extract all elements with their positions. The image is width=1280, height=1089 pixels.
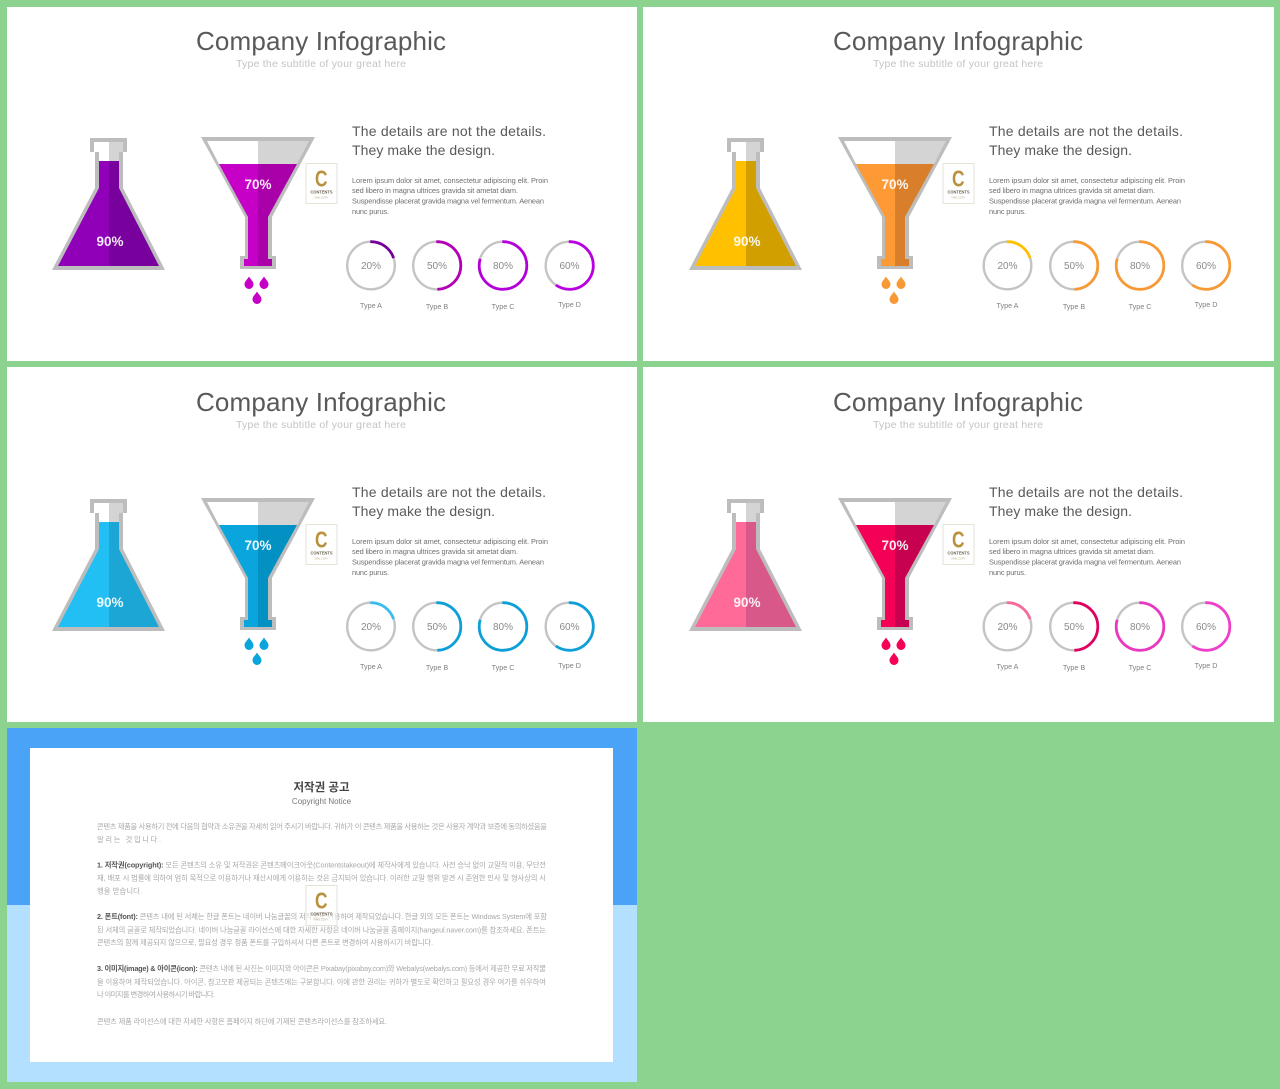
funnel chart 70% <box>201 137 315 269</box>
body text: nunc purus. <box>989 568 1026 577</box>
ring chart: Type B 50%: 50% <box>1064 261 1084 272</box>
body text: sed libero in magna ultrices gravida sit ametat diam. <box>352 186 518 195</box>
ring chart: Type C 80% <box>479 603 527 672</box>
ring chart: Type A 20% <box>347 603 395 671</box>
ring chart: Type D 60% <box>546 603 593 670</box>
ring chart: Type D 60%: Type D <box>558 300 581 309</box>
section: image and icon: 나 이미지를 변경하여 사용하시기 바랍니다. <box>97 990 215 999</box>
heading: They make the design. <box>352 503 495 519</box>
logo: C <box>315 888 328 914</box>
flask chart 90% <box>52 138 165 270</box>
ring chart: Type C 80%: 80% <box>493 622 513 633</box>
ring chart: Type C 80% <box>1116 603 1164 672</box>
ring chart: Type B 50%: 50% <box>427 261 447 272</box>
ring chart: Type B 50% <box>1050 603 1098 672</box>
icon: drops <box>882 276 906 304</box>
ring chart: Type A 20%: 20% <box>997 622 1018 633</box>
subtitle: Type the subtitle of your great here <box>873 58 1043 70</box>
ring chart: Type A 20%: 20% <box>997 261 1018 272</box>
logo <box>943 524 974 564</box>
subtitle: Type the subtitle of your great here <box>873 419 1043 431</box>
logo: MAIL COPY <box>314 918 328 922</box>
section: font: 된 서체의 글꼴로 제작되었습니다. 네이버 나눔글꼴 라이선스에 대한 자세한 사항은 네이버 나눔글꼴 홈페이지(hangeul.naver.com)를 참조하세요. 폰트는 <box>97 926 546 934</box>
body text <box>989 176 1185 216</box>
ring chart: Type B 50%: 50% <box>1064 622 1084 633</box>
logo: MAIL COPY <box>952 196 966 200</box>
ring chart: Type C 80%: 80% <box>493 261 513 272</box>
ring chart: Type D 60%: 60% <box>1196 261 1216 272</box>
flask chart 90%: 90% <box>96 595 124 610</box>
panel: copyright notice <box>7 728 637 1082</box>
ring chart: Type B 50% <box>413 603 461 672</box>
heading: The details are not the details. <box>352 484 546 500</box>
section: copyright: 재, 배포 시 법률에 의하여 엄히 목적으로 이용하거나 재산시에게 이용하는 것은 금지되어 있습니다. 이러한 교말 행위 발견 시 준엄한 민사 및 형사상의 시 <box>97 874 546 882</box>
heading: They make the design. <box>989 503 1132 519</box>
funnel chart 70% <box>838 137 952 269</box>
ring chart: Type A 20% <box>984 603 1031 671</box>
flask chart 90%: 90% <box>733 234 761 249</box>
ring chart: Type C 80%: Type C <box>1129 663 1151 672</box>
title: Company Infographic <box>196 387 446 417</box>
logo <box>306 886 337 926</box>
ring chart: Type B 50%: Type B <box>1063 302 1085 311</box>
ring chart: Type C 80%: Type C <box>492 302 514 311</box>
funnel chart 70%: 70% <box>244 177 272 192</box>
ring chart: Type A 20% <box>984 242 1031 310</box>
icon: drops <box>244 276 268 304</box>
icon: drops <box>244 638 268 665</box>
section: copyright: 1. 저작권(copyright): 모든 콘텐츠의 소유 및 저작권은 콘텐츠메이크아웃(Contentstakeout)에 제작사에게 있습니다. 사전 승낙 없이 교말적 이용, 무단전 <box>97 860 546 870</box>
logo: MAIL COPY <box>952 556 966 560</box>
funnel chart 70% <box>838 498 952 630</box>
logo: CONTENTS <box>948 550 970 556</box>
ring chart: Type D 60%: Type D <box>1195 661 1217 670</box>
logo <box>306 164 337 204</box>
title: Company Infographic <box>196 26 446 56</box>
ring chart: Type A 20% <box>347 242 395 310</box>
logo: MAIL COPY <box>314 196 328 200</box>
ring chart: Type B 50%: Type B <box>1063 663 1085 672</box>
ring chart: Type C 80%: 80% <box>1130 622 1150 633</box>
logo: CONTENTS <box>310 190 332 194</box>
heading: The details are not the details. <box>352 123 546 139</box>
ring chart: Type B 50% <box>413 242 461 311</box>
ring chart: Type D 60%: 60% <box>1196 622 1216 633</box>
ring chart: Type A 20%: Type A <box>997 662 1019 671</box>
intro paragraph <box>97 822 547 844</box>
panel: orange infographic <box>643 7 1274 361</box>
logo: CONTENTS <box>310 550 332 556</box>
ring chart: Type B 50%: 50% <box>427 622 447 633</box>
section: copyright <box>97 860 546 896</box>
section: font: 2. 폰트(font): 콘텐츠 내에 된 서체는 한글 폰트는 네이버 나눔글꼴의 저작물로 이용하여 제작되었습니다. 한글 외의 모든 폰트는 Windows System에 포함 <box>97 912 547 921</box>
body text: Lorem ipsum dolor sit amet, consectetur adipiscing elit. Proin <box>352 537 548 546</box>
ring chart: Type A 20%: 20% <box>361 261 381 272</box>
body text: Suspendisse placerat gravida magna vel fermentum. Aenean <box>989 196 1181 206</box>
ring chart: Type A 20%: Type A <box>997 301 1019 310</box>
ring chart: Type D 60%: Type D <box>1195 300 1217 309</box>
logo: C <box>315 166 328 192</box>
flask chart 90% <box>689 138 802 270</box>
title: Company Infographic <box>833 26 1083 56</box>
ring chart: Type C 80% <box>1116 242 1164 311</box>
flask chart 90%: 90% <box>733 595 761 610</box>
ring chart: Type A 20%: 20% <box>361 622 381 633</box>
ring chart: Type B 50% <box>1050 242 1098 311</box>
logo: MAIL COPY <box>314 556 328 560</box>
logo: CONTENTS <box>310 912 332 916</box>
section: image and icon <box>97 964 546 999</box>
ring chart: Type D 60% <box>1182 603 1230 670</box>
ring chart: Type A 20%: Type A <box>360 301 382 310</box>
logo: C <box>315 526 328 552</box>
notice heading: 저작권 공고 <box>293 780 350 794</box>
heading <box>352 484 546 519</box>
body text: Suspendisse placerat gravida magna vel fermentum. Aenean <box>352 558 544 566</box>
funnel chart 70%: 70% <box>244 538 272 553</box>
heading: The details are not the details. <box>989 123 1183 139</box>
section: image and icon: 3. 이미지(image) & 아이콘(icon): 콘텐츠 내에 된 사진는 이미지와 아이콘은 Pixabay(pixabay.com)와 Webalys(webalys.com) 등에서 제공한 무료 저작물 <box>97 964 546 973</box>
body text: nunc purus. <box>352 568 389 577</box>
subtitle: Type the subtitle of your great here <box>236 58 406 70</box>
ring chart: Type D 60% <box>1182 242 1230 309</box>
body text: sed libero in magna ultrices gravida sit ametat diam. <box>352 547 518 556</box>
section: image and icon: 을 이용하여 제작되었습니다. 아이콘, 참고모판 제공되는 콘텐츠에는 구분합니다. 이에 관한 권리는 귀하가 별도로 확인하고 필요성 경우 여기를 쉬우하여 <box>97 978 546 986</box>
body text <box>352 176 548 216</box>
ring chart: Type A 20%: Type A <box>360 662 382 671</box>
body text: Lorem ipsum dolor sit amet, consectetur adipiscing elit. Proin <box>352 176 548 185</box>
body text <box>989 537 1185 577</box>
intro paragraph: 콘텐츠 제품을 사용하기 전에 다음의 협약과 소유권을 자세히 읽어 주시기 바랍니다. 귀하가 이 콘텐츠 제품을 사용하는 것은 사용자 계약과 보증에 동의하셨음을 <box>97 822 547 831</box>
ring chart: Type B 50%: Type B <box>426 663 448 672</box>
panel: purple infographic <box>7 7 637 361</box>
flask chart 90%: 90% <box>96 234 124 249</box>
heading: They make the design. <box>352 142 495 158</box>
heading <box>989 484 1183 519</box>
body text <box>352 537 548 577</box>
logo <box>943 164 974 204</box>
ring chart: Type C 80% <box>479 242 527 311</box>
logo: C <box>952 166 965 192</box>
icon: drops <box>882 638 906 665</box>
ring chart: Type D 60%: 60% <box>559 622 580 633</box>
closing line: 콘텐츠 제품 라이선스에 대한 자세한 사항은 홈페이지 하단에 기재된 콘텐츠라이선스를 참조하세요. <box>97 1017 387 1026</box>
section: font <box>97 912 547 947</box>
ring chart: Type D 60%: 60% <box>559 261 580 272</box>
funnel chart 70%: 70% <box>881 538 909 553</box>
body text: Suspendisse placerat gravida magna vel fermentum. Aenean <box>352 196 544 206</box>
heading <box>989 123 1183 158</box>
section: font: 콘텐츠의 함께 제공되지 않으므로, 필요성 경우 정품 폰트를 구입하셔서 다른 폰트로 변경하여 사용하시기 바랍니다. <box>97 938 433 947</box>
logo: CONTENTS <box>948 190 970 194</box>
body text: Lorem ipsum dolor sit amet, consectetur adipiscing elit. Proin <box>989 537 1185 546</box>
body text: nunc purus. <box>352 207 389 216</box>
ring chart: Type D 60%: Type D <box>558 661 581 670</box>
heading <box>352 123 546 158</box>
funnel chart 70% <box>201 498 315 630</box>
body text: sed libero in magna ultrices gravida sit ametat diam. <box>989 186 1155 195</box>
flask chart 90% <box>52 499 165 631</box>
heading: They make the design. <box>989 142 1132 158</box>
body text: Lorem ipsum dolor sit amet, consectetur adipiscing elit. Proin <box>989 176 1185 185</box>
panel: blue infographic <box>7 367 637 722</box>
logo: C <box>952 526 965 552</box>
ring chart: Type C 80%: Type C <box>492 663 514 672</box>
ring chart: Type C 80%: 80% <box>1130 261 1150 272</box>
intro paragraph: 알리는 것입니다. <box>97 835 161 844</box>
ring chart: Type B 50%: Type B <box>426 302 448 311</box>
ring chart: Type C 80%: Type C <box>1129 302 1151 311</box>
notice subheading: Copyright Notice <box>292 797 352 806</box>
flask chart 90% <box>689 499 802 631</box>
body text: nunc purus. <box>989 207 1026 216</box>
section: copyright: 행을 받습니다. <box>97 886 142 896</box>
subtitle: Type the subtitle of your great here <box>236 419 406 431</box>
logo <box>306 524 337 564</box>
ring chart: Type D 60% <box>546 242 593 309</box>
body text: Suspendisse placerat gravida magna vel fermentum. Aenean <box>989 558 1181 566</box>
body text: sed libero in magna ultrices gravida sit ametat diam. <box>989 547 1155 556</box>
panel: pink infographic <box>643 367 1274 722</box>
heading: The details are not the details. <box>989 484 1183 500</box>
funnel chart 70%: 70% <box>881 177 909 192</box>
title: Company Infographic <box>833 387 1083 417</box>
